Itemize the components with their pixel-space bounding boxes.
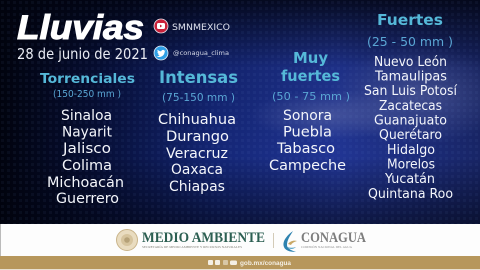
range: Intensas: (75-150 mm ) <box>162 91 235 104</box>
heading: Muy fuertes: Muy <box>293 49 328 67</box>
heading: Fuertes: Fuertes <box>377 11 443 29</box>
heading: Torrenciales: Torrenciales <box>40 71 135 87</box>
heading: Intensas: Intensas <box>159 68 238 88</box>
heading: Muy fuertes <box>281 49 340 85</box>
state list: Fuertes: Hidalgo <box>387 143 435 158</box>
state list: Torrenciales: Guerrero <box>56 191 119 207</box>
state list: Muy fuertes: Tabasco <box>276 141 335 157</box>
icon: Conagua drop <box>283 231 297 252</box>
state list: Intensas: Veracruz <box>166 146 228 162</box>
range: Torrenciales: (150-250 mm ) <box>53 89 121 100</box>
Medio Ambiente wordmark: MEDIO AMBIENTE <box>142 230 265 246</box>
social: Twitter <box>154 46 229 60</box>
logo: Medio Ambiente <box>116 230 265 250</box>
state list: Fuertes: Quintana Roo <box>368 187 453 202</box>
date: 28 de junio de 2021 <box>17 45 148 63</box>
state list: Muy fuertes: Sonora <box>283 108 332 124</box>
website: gob.mx/conagua <box>240 260 291 267</box>
panel: Muy fuertes <box>269 49 350 174</box>
icon: YouTube <box>154 19 168 33</box>
panel: Fuertes <box>364 11 458 202</box>
panel: Torrenciales <box>40 71 135 207</box>
state list: Intensas: Chiapas <box>169 179 225 195</box>
footer: white logo band <box>0 224 480 256</box>
state list: Fuertes: Tamaulipas <box>374 70 447 84</box>
state list: Fuertes: Nuevo León <box>374 54 447 70</box>
Conagua subtitle: COMISIÓN NACIONAL DEL AGUA <box>301 244 352 249</box>
icon: social media row <box>208 260 237 265</box>
state list: Fuertes <box>364 54 458 202</box>
state list: Fuertes: Morelos <box>387 158 435 172</box>
footer: gold band <box>0 256 480 270</box>
icon: Twitter <box>154 46 168 60</box>
range: Fuertes: (25 - 50 mm ) <box>367 34 453 49</box>
state list: Intensas: Chihuahua <box>158 112 236 128</box>
range: Muy fuertes: (50 - 75 mm ) <box>272 90 350 103</box>
state list: Torrenciales: Michoacán <box>47 175 124 191</box>
state list: Torrenciales: Sinaloa <box>61 108 112 124</box>
divider <box>272 233 275 248</box>
state list: Torrenciales: Colima <box>62 158 112 174</box>
state list: Muy fuertes <box>269 108 346 174</box>
state list: Torrenciales: Nayarit <box>62 124 112 140</box>
state list: Fuertes: Querétaro <box>379 127 442 143</box>
Twitter handle: @conagua_clima <box>173 49 229 57</box>
state list: Fuertes: Yucatán <box>384 171 435 187</box>
title: Lluvias <box>17 9 144 47</box>
state list: Torrenciales: Jalisco <box>62 141 111 157</box>
logo: Conagua <box>283 230 366 252</box>
state list: Fuertes: Guanajuato <box>374 114 447 128</box>
Medio Ambiente subtitle: SECRETARÍA DE MEDIO AMBIENTE Y RECURSOS NATURALES <box>142 244 242 249</box>
panel: Intensas <box>158 68 238 195</box>
state list: Muy fuertes: Puebla <box>283 124 332 140</box>
state list: Intensas <box>158 112 236 195</box>
Conagua wordmark: CONAGUA <box>301 230 366 246</box>
heading: Muy fuertes: fuertes <box>281 67 340 85</box>
social: YouTube <box>154 19 230 33</box>
state list: Intensas: Oaxaca <box>171 162 223 178</box>
state list: Torrenciales <box>47 108 124 207</box>
YouTube handle: SMNMEXICO <box>172 23 230 33</box>
state list: Muy fuertes: Campeche <box>269 158 346 174</box>
state list: Fuertes: Zacatecas <box>379 99 442 114</box>
state list: Fuertes: San Luis Potosí <box>364 83 458 99</box>
icon: national emblem <box>116 230 138 250</box>
state list: Intensas: Durango <box>166 129 229 145</box>
